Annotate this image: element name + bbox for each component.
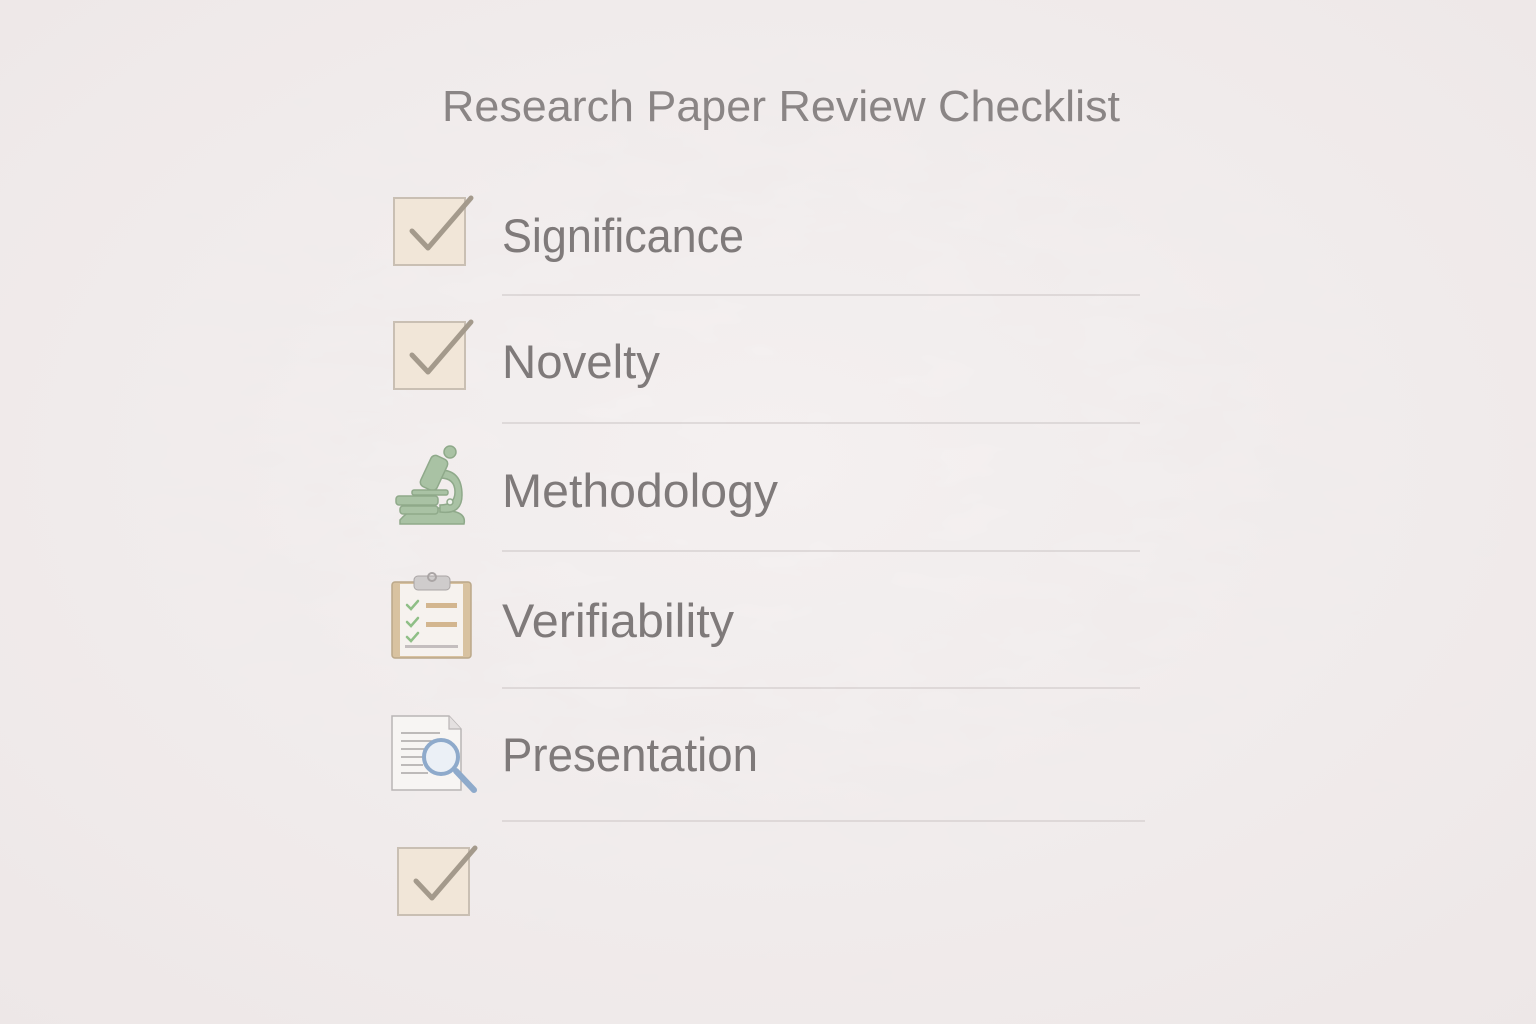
- icon: microscope: [396, 446, 464, 524]
- label: Methodology: [502, 464, 778, 517]
- item: Presentation: [392, 716, 758, 790]
- item: Verifiability: [392, 573, 735, 658]
- icon: checkbox: [394, 322, 471, 389]
- item: empty checkbox row: [398, 848, 475, 915]
- title: Research Paper Review Checklist: [442, 82, 1120, 131]
- icon: checkbox: [398, 848, 475, 915]
- item: Methodology: [396, 446, 778, 524]
- label: Novelty: [502, 335, 660, 388]
- icon: document with magnifier: [392, 716, 474, 790]
- label: Presentation: [502, 728, 758, 781]
- icon: checkbox: [394, 198, 471, 265]
- icon: clipboard: [392, 573, 471, 658]
- item: Significance: [394, 198, 744, 265]
- label: Significance: [502, 209, 744, 262]
- item: Novelty: [394, 322, 660, 389]
- label: Verifiability: [502, 594, 735, 647]
